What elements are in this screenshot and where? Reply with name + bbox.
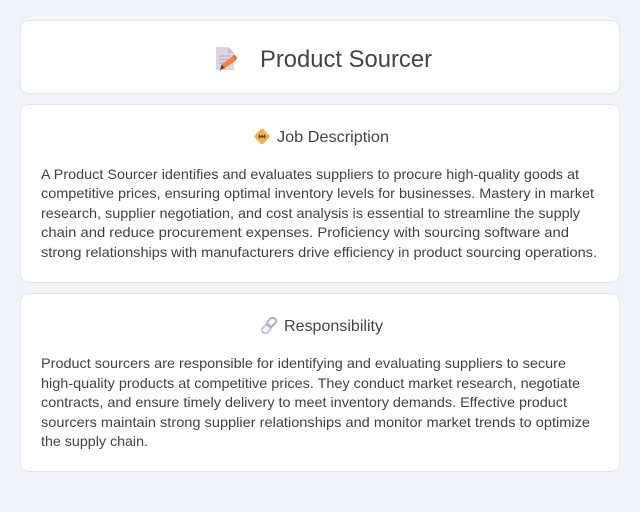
text block: job description	[41, 166, 597, 260]
heading: Product Sourcer: Product Sourcer	[260, 46, 432, 73]
text block: job description: research, supplier negotiation, and cost analysis is essential to streamline the supply	[41, 205, 580, 221]
icon: chain link	[261, 316, 277, 335]
text block: responsibility: contracts, and ensure timely delivery to meet inventory demands. Effective product	[41, 394, 567, 410]
text block: job description: competitive prices, ensuring optimal inventory levels for businesses. Mastery in market	[41, 185, 594, 201]
icon: document with pencil	[216, 47, 237, 70]
text block: responsibility: Product sourcers are responsible for identifying and evaluating suppliers to secure	[41, 355, 566, 371]
text block: responsibility	[41, 355, 590, 449]
icon: orange diamond sign	[254, 128, 270, 145]
text block: job description: strong relationships with manufacturers drive efficiency in product sourcing operations.	[41, 244, 597, 260]
text block: responsibility: high-quality products at competitive prices. They conduct market research, negotiate	[41, 375, 580, 391]
panel: job description	[20, 104, 620, 282]
heading: Job Description: Job Description	[277, 129, 389, 146]
heading: Responsibility: Responsibility	[284, 318, 383, 335]
text block: responsibility: the supply chain.	[41, 433, 148, 449]
panel: responsibility	[20, 294, 620, 472]
text block: responsibility: sourcers maintain strong supplier relationships and monitor market trends to optimize	[41, 414, 590, 430]
text block: job description: A Product Sourcer identifies and evaluates suppliers to procure high-quality goods at	[41, 166, 579, 182]
text block: job description: chain and reduce procurement expenses. Proficiency with sourcing software and	[41, 224, 569, 240]
panel: title	[20, 20, 620, 94]
